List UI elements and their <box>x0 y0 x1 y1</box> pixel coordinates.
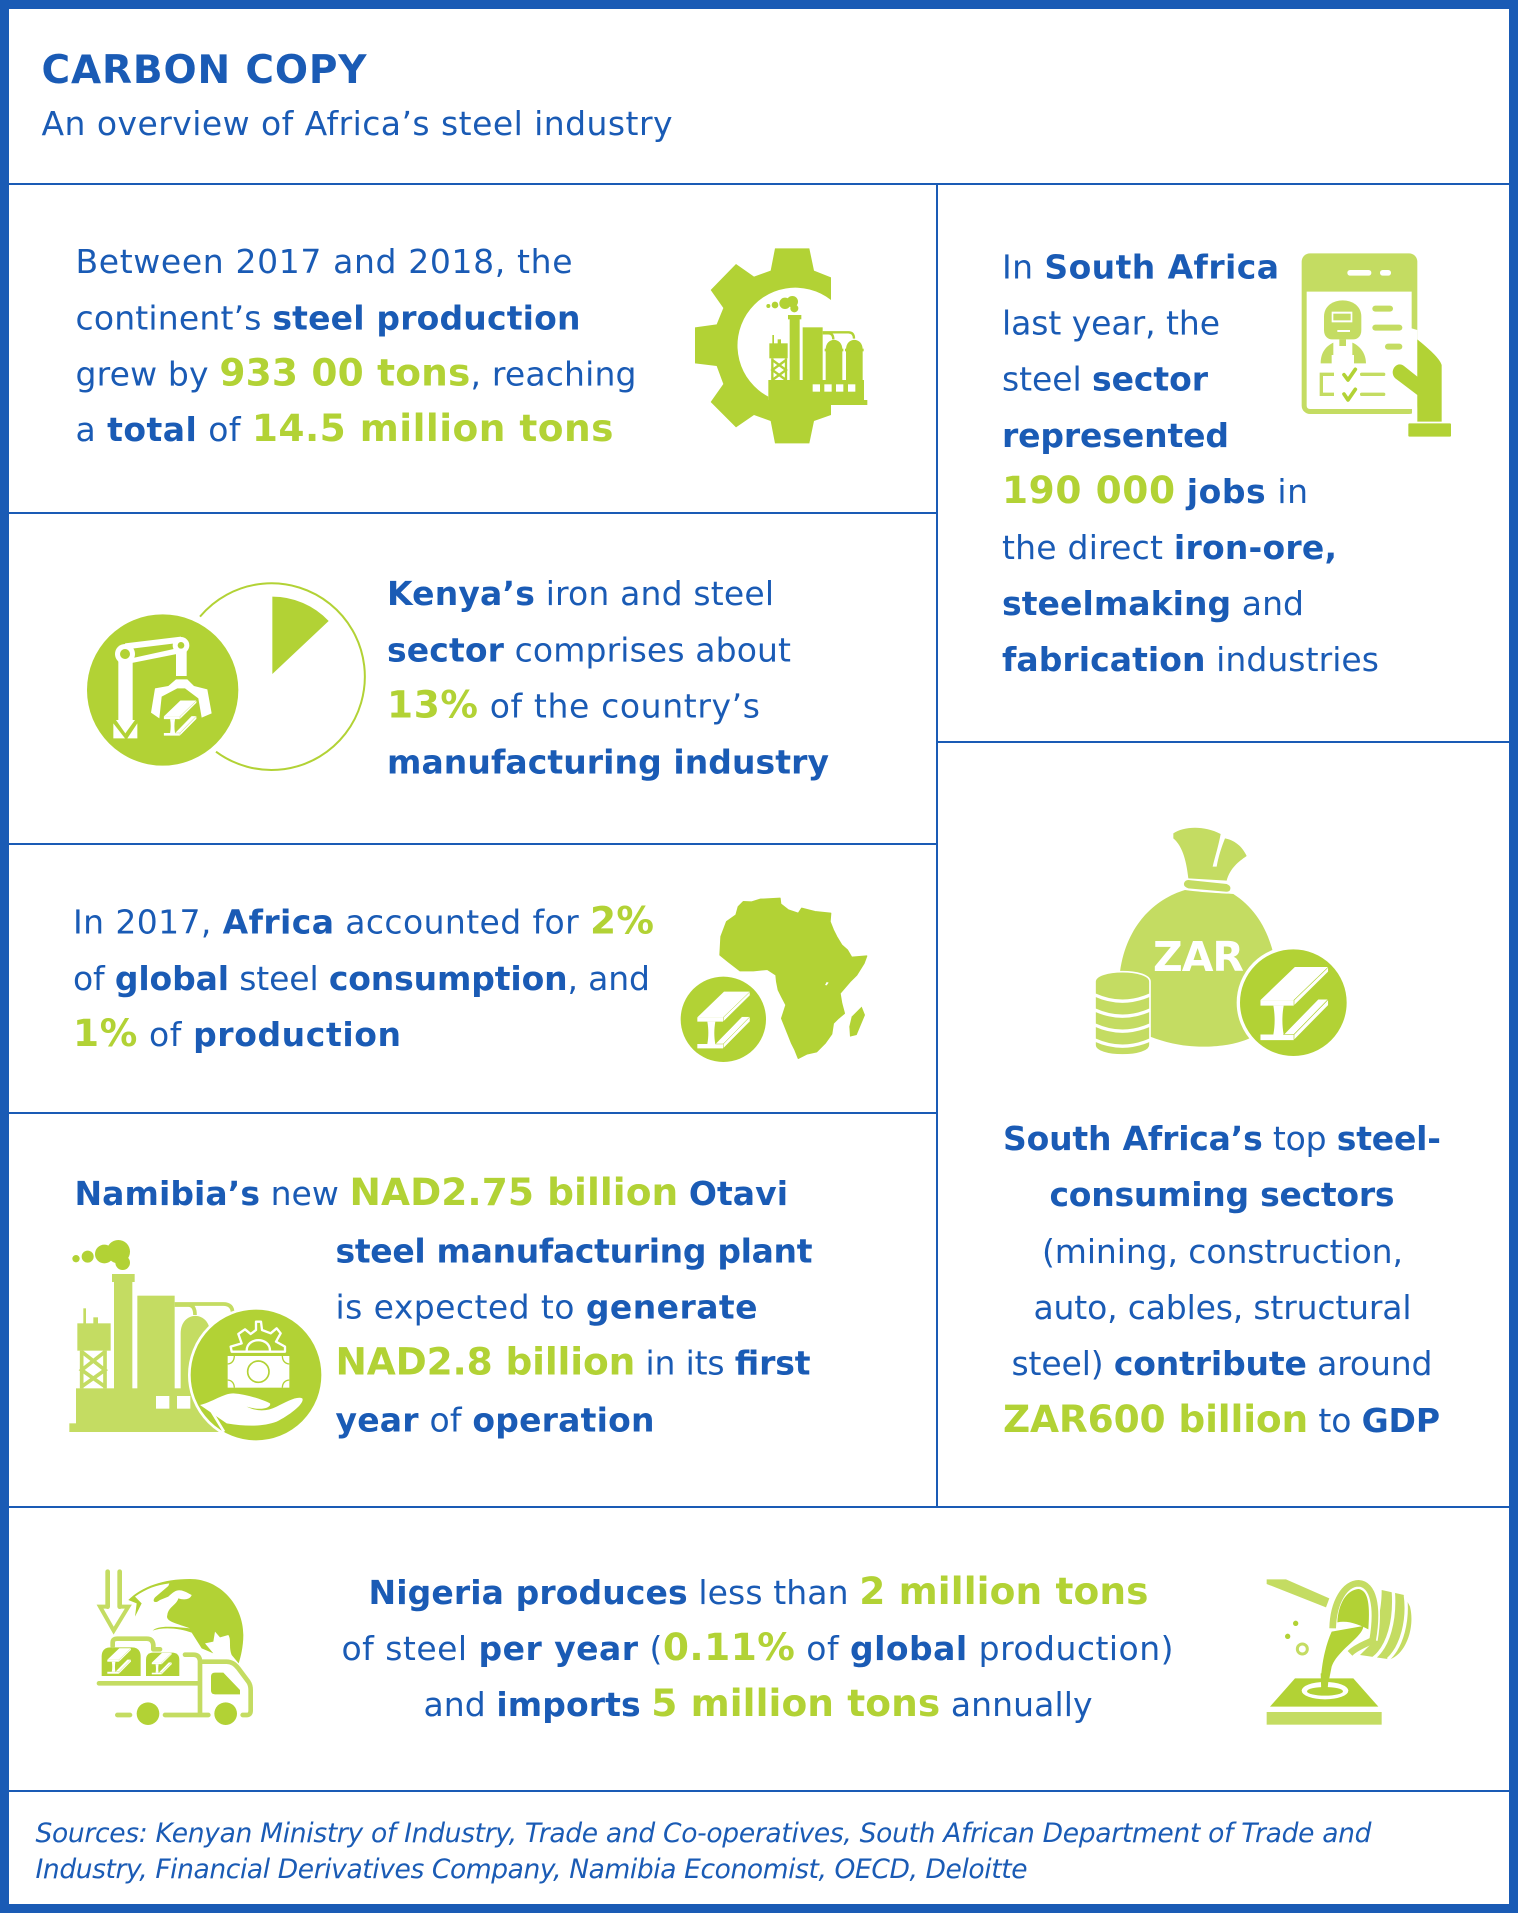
panel: continent steel production text: grew by 933 00 tons, reaching <box>76 350 636 394</box>
panel: Nigeria text: of steel per year (0.11% of global production) <box>342 1625 1174 1669</box>
panel: South Africa sectors text: consuming sectors <box>1050 1175 1394 1214</box>
panel: South Africa jobs text: 190 000 jobs in <box>1002 468 1308 512</box>
panel: Africa share text: In 2017, Africa accounted for 2% <box>73 898 654 942</box>
sources: Sources: Kenyan Ministry of Industry, Trade and Co-operatives, South African Department of Trade and <box>36 1818 1372 1849</box>
panel: South Africa sectors text: steel) contribute around <box>1012 1344 1432 1383</box>
panel: South Africa jobs text: represented <box>1002 416 1229 455</box>
panel: Nigeria text: Nigeria produces less than 2 million tons <box>368 1569 1148 1613</box>
icon: factory with money in hand <box>69 1240 323 1442</box>
icon: money bag with coins and beam <box>1095 828 1348 1058</box>
panel: South Africa sectors text: ZAR600 billion to GDP <box>1003 1397 1440 1441</box>
panel: Namibia text: is expected to generate <box>336 1288 758 1326</box>
panel: South Africa jobs text: steel sector <box>1002 360 1209 398</box>
panel: Namibia text: Namibia’s new NAD2.75 billion Otavi <box>74 1170 788 1214</box>
panel: Namibia text: steel manufacturing plant <box>336 1232 813 1270</box>
panel: Africa share text: of global steel consumption, and <box>73 959 650 998</box>
panel: Namibia text: year of operation <box>336 1400 654 1440</box>
panel: continent steel production text: a total of 14.5 million tons <box>76 406 614 450</box>
panel: South Africa sectors text: (mining, construction, <box>1042 1232 1403 1271</box>
panel: continent steel production text: continent’s steel production <box>76 298 580 338</box>
panel: Kenya text <box>387 574 829 782</box>
panel: Kenya text: 13% of the country’s <box>387 682 760 726</box>
sources <box>36 1818 1372 1885</box>
sources: Industry, Financial Derivatives Company, Namibia Economist, OECD, Deloitte <box>36 1854 1028 1885</box>
icon: Africa map with steel beam <box>681 898 867 1062</box>
panel: South Africa sectors text <box>1003 1119 1441 1441</box>
panel: South Africa jobs text: steelmaking and <box>1002 584 1304 623</box>
panel: continent steel production text: Between 2017 and 2018, the <box>76 242 572 281</box>
panel: Africa share text: 1% of production <box>73 1011 401 1055</box>
panel: Kenya text: manufacturing industry <box>387 742 829 782</box>
panel: Namibia text: NAD2.8 billion in its first <box>336 1340 811 1384</box>
panel: Nigeria text: and imports 5 million tons annually <box>424 1681 1092 1725</box>
title: CARBON COPY <box>42 48 367 93</box>
panel: South Africa jobs text <box>1002 248 1379 679</box>
panel: Africa share text <box>73 898 654 1055</box>
icon: truck and globe imports <box>99 1572 251 1725</box>
icon: robot arm pie chart <box>87 583 365 770</box>
bag label: ZAR <box>1153 933 1244 981</box>
panel: South Africa jobs text: the direct iron-ore, <box>1002 528 1337 567</box>
panel: South Africa sectors text: South Africa’s top steel- <box>1003 1119 1441 1158</box>
subtitle: An overview of Africa’s steel industry <box>42 104 672 143</box>
panel: Namibia text <box>74 1170 813 1440</box>
icon: gear with factory <box>695 248 867 443</box>
panel: South Africa jobs text: last year, the <box>1002 304 1220 342</box>
panel: Kenya text: Kenya’s iron and steel <box>387 574 774 613</box>
panel: Kenya text: sector comprises about <box>387 630 791 670</box>
icon: worker profile on tablet <box>1302 253 1451 437</box>
panel: South Africa jobs text: In South Africa <box>1002 248 1279 286</box>
panel: South Africa jobs text: fabrication industries <box>1002 640 1379 679</box>
panel: continent steel production text <box>76 242 636 450</box>
panel: South Africa sectors text: auto, cables, structural <box>1034 1288 1412 1327</box>
panel: Nigeria text <box>342 1569 1174 1725</box>
icon: pouring molten steel ladle <box>1267 1579 1411 1725</box>
